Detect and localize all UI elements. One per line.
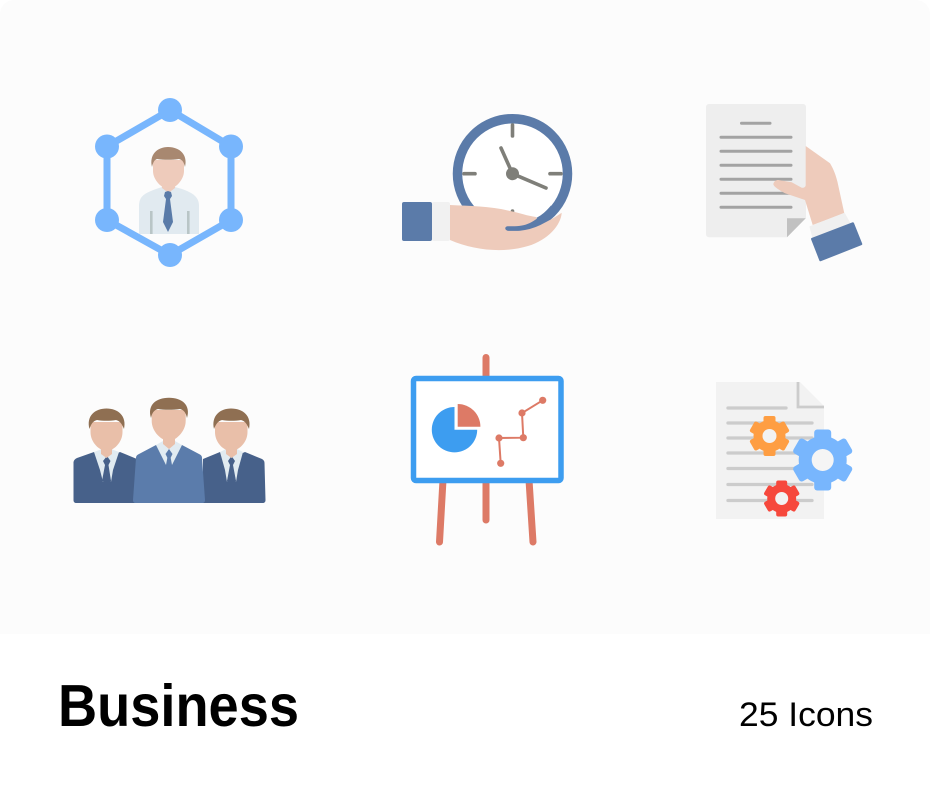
icon: document with gears [716,382,853,519]
document text lines [721,123,791,207]
easel legs [440,358,533,542]
icon: hand holding document [706,104,861,260]
blue gear [792,430,853,490]
clock ring tail over hand [505,206,558,231]
sleeve [402,202,432,241]
page fold [787,218,806,237]
pie chart [432,404,480,452]
left businessman [74,408,137,503]
icon: hand holding clock [402,119,568,250]
shirt cuff [810,213,850,237]
document text lines [728,408,812,500]
right businessman [203,408,266,503]
center businessman [133,398,205,503]
icon: team of three businessmen [74,398,266,503]
document page [706,104,806,237]
board [414,378,561,480]
document page [716,382,824,519]
hand [450,205,562,250]
line chart [495,397,546,467]
icon: person in hexagon network [95,98,243,267]
title: Business [58,673,299,739]
orange gear [749,416,790,456]
icon count: 25 Icons [739,696,873,734]
hexagon network [95,98,243,267]
red gear [763,480,800,516]
shirt cuff [432,202,450,241]
page fold [798,382,824,407]
clock [458,119,568,229]
person [139,147,199,234]
sleeve [812,224,861,260]
hand [773,146,844,225]
icon: presentation board on easel [414,358,561,542]
